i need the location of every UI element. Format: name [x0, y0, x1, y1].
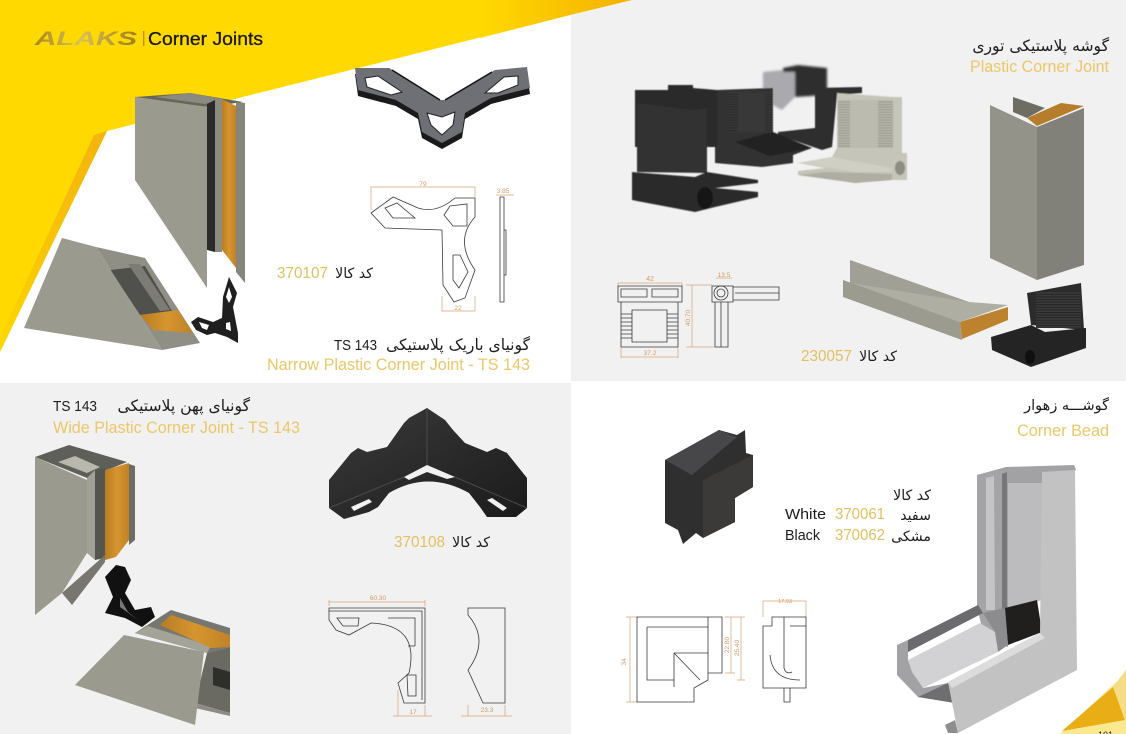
- caption narrow joint: TS 143: [334, 338, 377, 354]
- item code 230057: 230057: [801, 348, 852, 365]
- technical drawing 370108: 60.30: [370, 595, 387, 602]
- panel: plastic corner joint: [618, 37, 1110, 367]
- logo and heading: [33, 28, 263, 50]
- gold corner accent: [1060, 670, 1126, 734]
- technical drawing 370107: 3.85: [497, 188, 510, 195]
- window profile vertical: [990, 97, 1084, 280]
- window profile lower: [24, 238, 200, 350]
- logo and heading: Corner Joints: [148, 28, 263, 49]
- caption narrow joint: Narrow Plastic Corner Joint - TS 143: [267, 355, 530, 374]
- caption plastic joint: گوشه پلاستیکی توری: [972, 37, 1110, 56]
- technical drawing bead: 25.40: [734, 639, 741, 656]
- item code list: 370062: [835, 527, 885, 544]
- technical drawing 230057: 37.2: [644, 350, 657, 357]
- panel: narrow plastic corner joint: [24, 28, 531, 374]
- black bead joint photo: [665, 430, 753, 544]
- item code 370107: 370107: [277, 265, 328, 282]
- item code 230057: کد کالا: [859, 349, 897, 365]
- technical drawing 230057: [618, 272, 779, 358]
- item code list: مشکی: [891, 529, 931, 545]
- technical drawing 370107: 79: [419, 181, 427, 188]
- caption corner bead: گوشـــه زهوار: [1023, 397, 1109, 414]
- technical drawing 370108: 17: [409, 709, 417, 716]
- technical drawing bead: [621, 599, 806, 702]
- caption narrow joint: [267, 336, 531, 374]
- item code 370107: کد کالا: [335, 266, 373, 282]
- technical drawing 370108: 23.3: [481, 707, 494, 714]
- product joint photo: [329, 408, 527, 519]
- item code 370108: کد کالا: [452, 535, 490, 551]
- caption plastic joint: Plastic Corner Joint: [970, 57, 1109, 76]
- item code 370108: 370108: [394, 534, 445, 551]
- caption wide joint: TS 143: [53, 399, 97, 415]
- item code list: 370061: [835, 506, 885, 523]
- item code 370108: [394, 534, 490, 551]
- window profile upper: [135, 93, 245, 288]
- window profile upper: [35, 445, 135, 615]
- caption wide joint: [53, 397, 300, 437]
- caption wide joint: Wide Plastic Corner Joint - TS 143: [53, 418, 300, 437]
- panel: corner bead: [621, 397, 1126, 734]
- item code list: [785, 488, 931, 545]
- exploded joints photo: [632, 65, 907, 212]
- product joint photo: [355, 67, 530, 149]
- technical drawing 370108: [329, 595, 512, 716]
- window profile horizontal: [843, 260, 1008, 340]
- small black joint photo: [991, 283, 1086, 367]
- item code 230057: [801, 348, 897, 365]
- caption corner bead: Corner Bead: [1017, 421, 1109, 440]
- logo and heading: ALAKS: [33, 29, 137, 50]
- technical drawing 230057: 42: [646, 276, 654, 283]
- item code 370107: [277, 265, 373, 282]
- caption plastic joint: [970, 37, 1110, 76]
- technical drawing 230057: 40.70: [685, 309, 692, 326]
- yellow corner banner: [0, 0, 632, 352]
- item code list: کد کالا: [893, 488, 931, 504]
- technical drawing 230057: 13.5: [718, 272, 731, 279]
- small black joint: [191, 277, 238, 343]
- technical drawing 370107: 22: [454, 305, 462, 312]
- item code list: Black: [785, 528, 821, 544]
- item code list: سفید: [900, 508, 931, 524]
- caption narrow joint: گونیای باریک پلاستیکی: [386, 336, 531, 355]
- panel: wide plastic corner joint: [35, 397, 527, 725]
- caption wide joint: گونیای پهن پلاستیکی: [117, 397, 251, 416]
- technical drawing 370107: [371, 181, 514, 312]
- technical drawing bead: 17.93: [778, 599, 792, 605]
- technical drawing bead: 34: [621, 658, 628, 666]
- technical drawing bead: 22.80: [724, 636, 731, 653]
- aluminium window corner profile: [897, 465, 1077, 733]
- caption corner bead: [1017, 397, 1109, 440]
- black joint assembly: [105, 565, 155, 627]
- item code list: White: [785, 507, 826, 523]
- window profile lower: [75, 610, 230, 725]
